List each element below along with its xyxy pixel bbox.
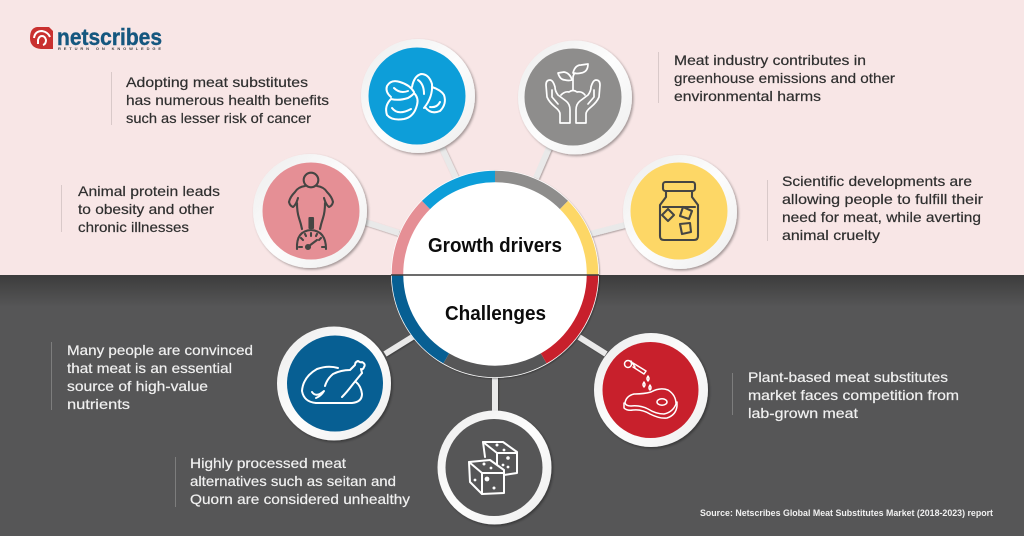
background: dark lower panel [0,275,1024,536]
source note: Source: Netscribes Global Meat Substitutes Market (2018-2023) report [700,508,993,518]
text block: nutrients: nutrients [67,396,130,412]
text block: scientific developments: need for meat, while averting [782,209,981,225]
text block: lab-grown competition [732,369,959,421]
ring: yellow segment [564,205,593,275]
ring: gray segment [495,176,564,205]
background: pink upper panel [0,0,1024,275]
node: hands and seedling icon [518,40,632,154]
text block: health benefits [112,72,329,126]
ring: pink segment [397,205,426,275]
text block: environment: environmental harms [674,88,821,104]
text block: health benefits: has numerous health benefits [126,92,329,108]
text block: environment: greenhouse emissions and other [674,70,895,86]
text block: environment: Meat industry contributes in [674,52,866,68]
text block: lab-grown competition: Plant-based meat substitutes [748,369,948,385]
heading: challenges: Challenges [445,303,546,325]
text block: processed alternatives: Quorn are considered unhealthy [190,491,410,507]
text block: obesity: to obesity and other [78,201,214,217]
text block: scientific developments: animal cruelty [782,227,880,243]
text block: lab-grown competition: market faces competition from [748,387,959,403]
node: beans icon [361,39,475,153]
node: jar icon [623,155,737,269]
text block: environment [658,52,895,104]
ring: red segment [544,275,592,358]
text block: health benefits: such as lesser risk of cancer [126,110,311,126]
node: steak and dropper icon [594,333,708,447]
text block: health benefits: Adopting meat substitutes [126,74,308,90]
ring: blue segment [426,176,495,205]
text block: scientific developments: allowing people to fulfill their [782,191,983,207]
text block: scientific developments [768,173,983,243]
node: chicken icon [277,326,391,440]
node: dice icon [438,410,552,524]
text block: nutrients: that meat is an essential [67,360,232,376]
node: obesity on scale icon [253,154,367,268]
central hub [391,170,599,378]
logo: netscribes: netscribes [57,24,162,50]
text block: processed alternatives: Highly processed meat [190,455,346,471]
ring: dark segment [446,358,544,371]
ring: navy segment [398,275,446,358]
text block: obesity: Animal protein leads [78,183,220,199]
text block: nutrients: Many people are convinced [67,342,253,358]
text block: obesity: chronic illnesses [78,219,189,235]
text block: lab-grown competition: lab-grown meat [748,405,858,421]
logo: netscribes: RETURN ON KNOWLEDGE [58,46,161,51]
text block: processed alternatives: alternatives such as seitan and [190,473,396,489]
text block: processed alternatives [176,455,410,507]
text block: nutrients: source of high-value [67,378,208,394]
text block: nutrients [52,342,253,412]
text block: scientific developments: Scientific developments are [782,173,972,189]
text block: obesity [62,183,220,235]
connectors [365,148,625,412]
heading: growth drivers: Growth drivers [428,235,562,257]
